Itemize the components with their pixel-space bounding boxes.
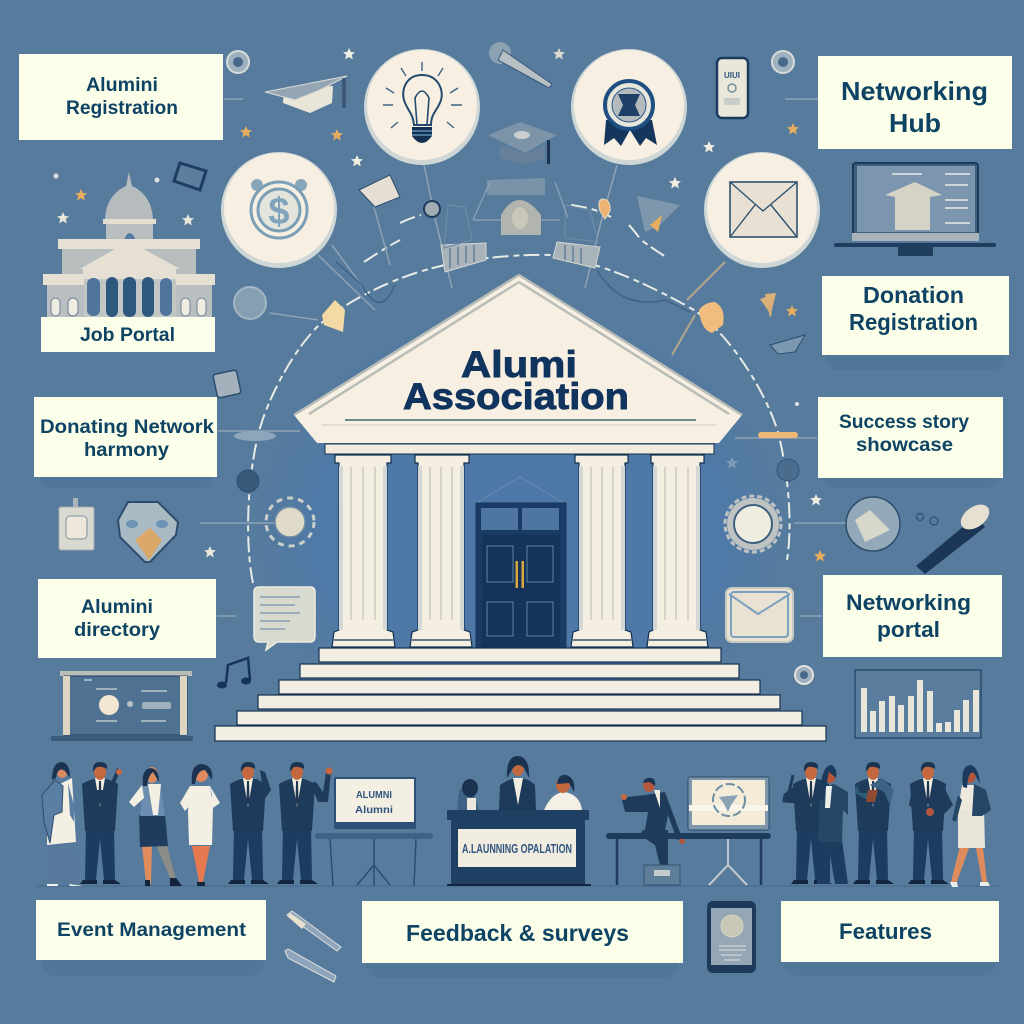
label: Networking portal: Networking xyxy=(846,590,971,615)
label: Event Management: Event Management xyxy=(57,920,247,941)
label: Feedback & surveys xyxy=(362,901,683,963)
small decorative connector icons xyxy=(59,175,994,574)
icon: microphone top xyxy=(489,42,552,88)
label: Donating Network harmony: Donating Network xyxy=(40,417,214,438)
capitol building xyxy=(43,172,215,318)
table with monitor: ALUMNI xyxy=(356,790,392,801)
circle: dollar donation xyxy=(221,152,337,268)
people group left xyxy=(42,762,332,886)
connector lines xyxy=(200,99,850,616)
icon: book xyxy=(174,163,206,190)
label: Alumini directory: Alumini xyxy=(81,597,153,618)
label: Networking Hub: Networking xyxy=(841,76,988,106)
label: Alumini directory: directory xyxy=(74,620,160,641)
person: man standing xyxy=(908,762,953,884)
icon: tablet bottom xyxy=(707,901,756,973)
label: Features xyxy=(781,901,999,962)
icon: smartphone top: UIUI xyxy=(724,71,740,80)
roof pediment xyxy=(294,275,742,454)
stars and sparkles xyxy=(54,48,826,562)
glow behind building xyxy=(220,290,820,770)
label: Networking Hub xyxy=(818,56,1012,149)
laptop xyxy=(834,163,996,256)
label: Networking portal xyxy=(823,575,1002,657)
speech bubble xyxy=(254,587,315,650)
label: Donation Registration xyxy=(822,276,1009,355)
label: Networking portal: portal xyxy=(877,617,940,642)
label: Job Portal: Job Portal xyxy=(80,325,175,346)
person: woman in suit xyxy=(817,765,848,884)
label: Success story showcase: Success story xyxy=(839,412,969,433)
table with leaning man and screen xyxy=(606,777,771,885)
person: woman in skirt xyxy=(129,767,182,886)
person: woman at desk xyxy=(544,775,582,810)
label: Features: Features xyxy=(839,919,932,944)
person: man hand on head xyxy=(228,762,271,884)
centre faded banner icons xyxy=(441,178,600,272)
bar chart xyxy=(855,670,981,738)
title: Association xyxy=(403,376,629,417)
icon: graduation cap centre xyxy=(488,122,557,165)
person: woman in white apron xyxy=(42,762,83,886)
person: standing woman xyxy=(499,756,536,810)
dashed connection arcs xyxy=(248,205,790,583)
label: Job Portal xyxy=(41,317,215,352)
label: Networking Hub: Hub xyxy=(889,108,941,138)
label: Feedback & surveys: Feedback & surveys xyxy=(406,920,629,946)
label: Success story showcase xyxy=(818,397,1003,478)
person: woman in white dress xyxy=(180,764,220,886)
person: man presenting xyxy=(277,762,332,884)
table with monitor xyxy=(315,777,433,886)
title xyxy=(403,344,629,417)
door xyxy=(476,477,566,647)
person: man with raised hand xyxy=(784,762,832,884)
label: Donating Network harmony xyxy=(34,397,217,477)
floor line xyxy=(36,885,1000,887)
icon: small ring badges xyxy=(227,51,813,684)
label: Alumini Registration xyxy=(19,54,223,140)
person: man gesturing xyxy=(80,762,122,884)
circle: light bulb idea xyxy=(364,49,480,165)
icon: music note xyxy=(217,658,251,688)
table with monitor: Alumni xyxy=(355,805,393,816)
label: Donation Registration: Registration xyxy=(849,309,978,335)
people group right xyxy=(784,762,991,887)
mail icon right xyxy=(726,588,793,642)
label shadows xyxy=(40,282,1004,978)
presentation board left xyxy=(51,671,193,741)
reception podium with staff: A.LAUNNING OPALATION xyxy=(462,842,572,856)
columns xyxy=(332,455,708,647)
circle: dollar donation: $ xyxy=(268,191,290,233)
icon: smartphone top xyxy=(717,58,748,118)
label: Success story showcase: showcase xyxy=(856,435,953,456)
label: Alumini directory xyxy=(38,579,216,658)
icon: graduation cap left xyxy=(265,76,347,113)
circle: envelope xyxy=(704,152,820,268)
title: Alumi xyxy=(461,344,577,385)
person: leaning man xyxy=(621,778,685,865)
main temple building xyxy=(215,275,826,741)
person: seated woman xyxy=(457,779,479,810)
reception podium with staff xyxy=(447,756,591,886)
label: Donating Network harmony: harmony xyxy=(84,440,169,461)
label: Event Management xyxy=(36,900,266,960)
stairs xyxy=(215,648,826,741)
circle: alumni seal badge xyxy=(571,49,687,165)
person: woman walking xyxy=(950,765,991,887)
icon: pens xyxy=(285,911,341,982)
label: Alumini Registration: Registration xyxy=(66,98,178,119)
label: Alumini Registration: Alumini xyxy=(86,75,158,96)
person: man with bag xyxy=(853,762,894,884)
label: Donation Registration: Donation xyxy=(863,282,964,308)
